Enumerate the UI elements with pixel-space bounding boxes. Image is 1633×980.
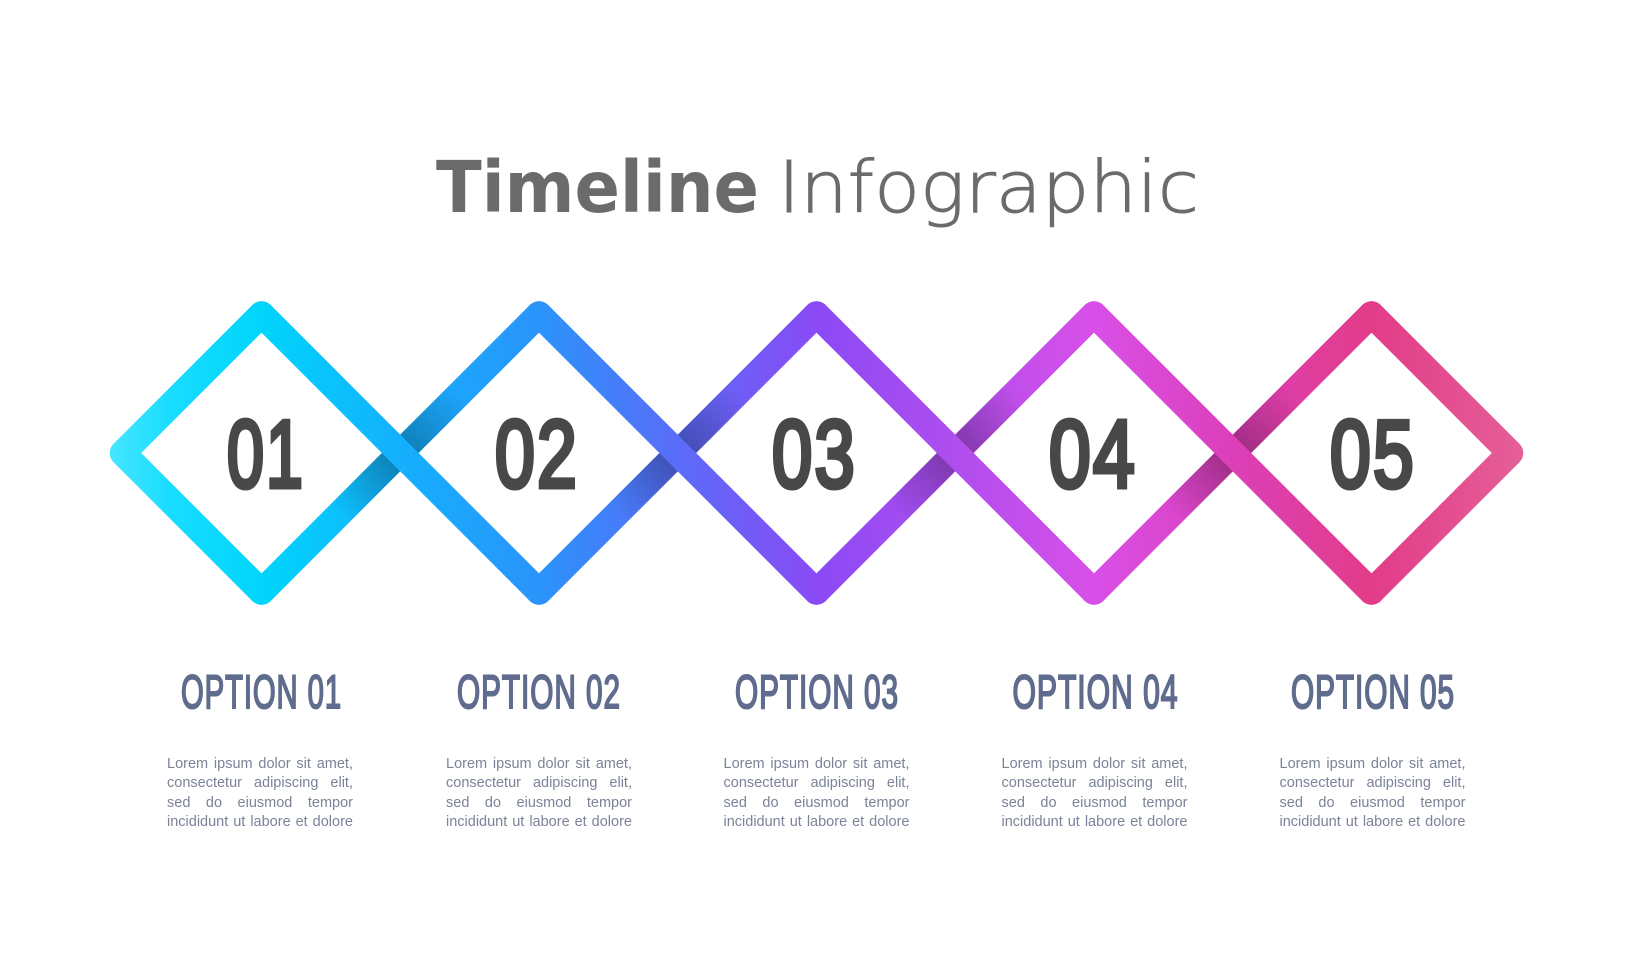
column: option 01 [167, 665, 353, 830]
text block: option 01 [167, 756, 353, 830]
number 01: 01 [227, 401, 305, 508]
ribbon strand: rising 4 to 5 (under) [1094, 314, 1372, 592]
column: option 05 [1280, 665, 1466, 830]
ribbon strand: falling 2 to 3 (over) [539, 314, 816, 592]
text block: option 04: sed do eiusmod tempor [1002, 795, 1188, 811]
title: Infographic [778, 146, 1199, 229]
text block: option 05: sed do eiusmod tempor [1280, 795, 1466, 811]
text block: option 04: consectetur adipiscing elit, [1002, 775, 1188, 791]
text block: option 05: Lorem ipsum dolor sit amet, [1280, 756, 1466, 772]
text block: option 05: incididunt ut labore et dolore [1280, 814, 1466, 830]
text block: option 03: Lorem ipsum dolor sit amet, [724, 756, 910, 772]
text block: option 02: consectetur adipiscing elit, [446, 775, 632, 791]
ribbon strand: rising 3 to 4 (under) [816, 314, 1094, 592]
column: option 03 [724, 665, 910, 830]
text block: option 01: incididunt ut labore et dolore [167, 814, 353, 830]
text block: option 01: sed do eiusmod tempor [167, 795, 353, 811]
text block: option 01: Lorem ipsum dolor sit amet, [167, 756, 353, 772]
number 03: 03 [772, 401, 857, 508]
text block: option 04: Lorem ipsum dolor sit amet, [1002, 756, 1188, 772]
text block: option 02: incididunt ut labore et dolore [446, 814, 632, 830]
ribbon strand: falling 1 to 2 (over) [262, 314, 539, 592]
text block: option 05: consectetur adipiscing elit, [1280, 775, 1466, 791]
number 05: 05 [1330, 401, 1416, 508]
text block: option 02 [446, 756, 632, 830]
number 02: 02 [495, 401, 579, 508]
ribbon end: right tip of diamond 5 [1372, 314, 1510, 592]
text block: option 04: incididunt ut labore et dolore [1002, 814, 1188, 830]
text block: option 04 [1002, 756, 1188, 830]
title: Timeline [436, 146, 759, 229]
number 04: 04 [1049, 401, 1137, 508]
text block: option 02: sed do eiusmod tempor [446, 795, 632, 811]
ribbon strand: falling 4 to 5 (over) [1094, 314, 1372, 592]
column: option 04 [1002, 665, 1188, 830]
text block: option 03: consectetur adipiscing elit, [724, 775, 910, 791]
ribbon strand: rising 1 to 2 (under) [262, 314, 539, 592]
ribbon strand: falling 3 to 4 (over) [816, 314, 1094, 592]
text block: option 03 [724, 756, 910, 830]
column: option 02 [446, 665, 632, 830]
text block: option 05 [1280, 756, 1466, 830]
text block: option 01: consectetur adipiscing elit, [167, 775, 353, 791]
ribbon strand: rising 2 to 3 (under) [539, 314, 816, 592]
ribbon end: left tip of diamond 1 [123, 314, 262, 592]
title [436, 146, 1199, 229]
text block: option 02: Lorem ipsum dolor sit amet, [446, 756, 632, 772]
text block: option 03: incididunt ut labore et dolore [724, 814, 910, 830]
text block: option 03: sed do eiusmod tempor [724, 795, 910, 811]
